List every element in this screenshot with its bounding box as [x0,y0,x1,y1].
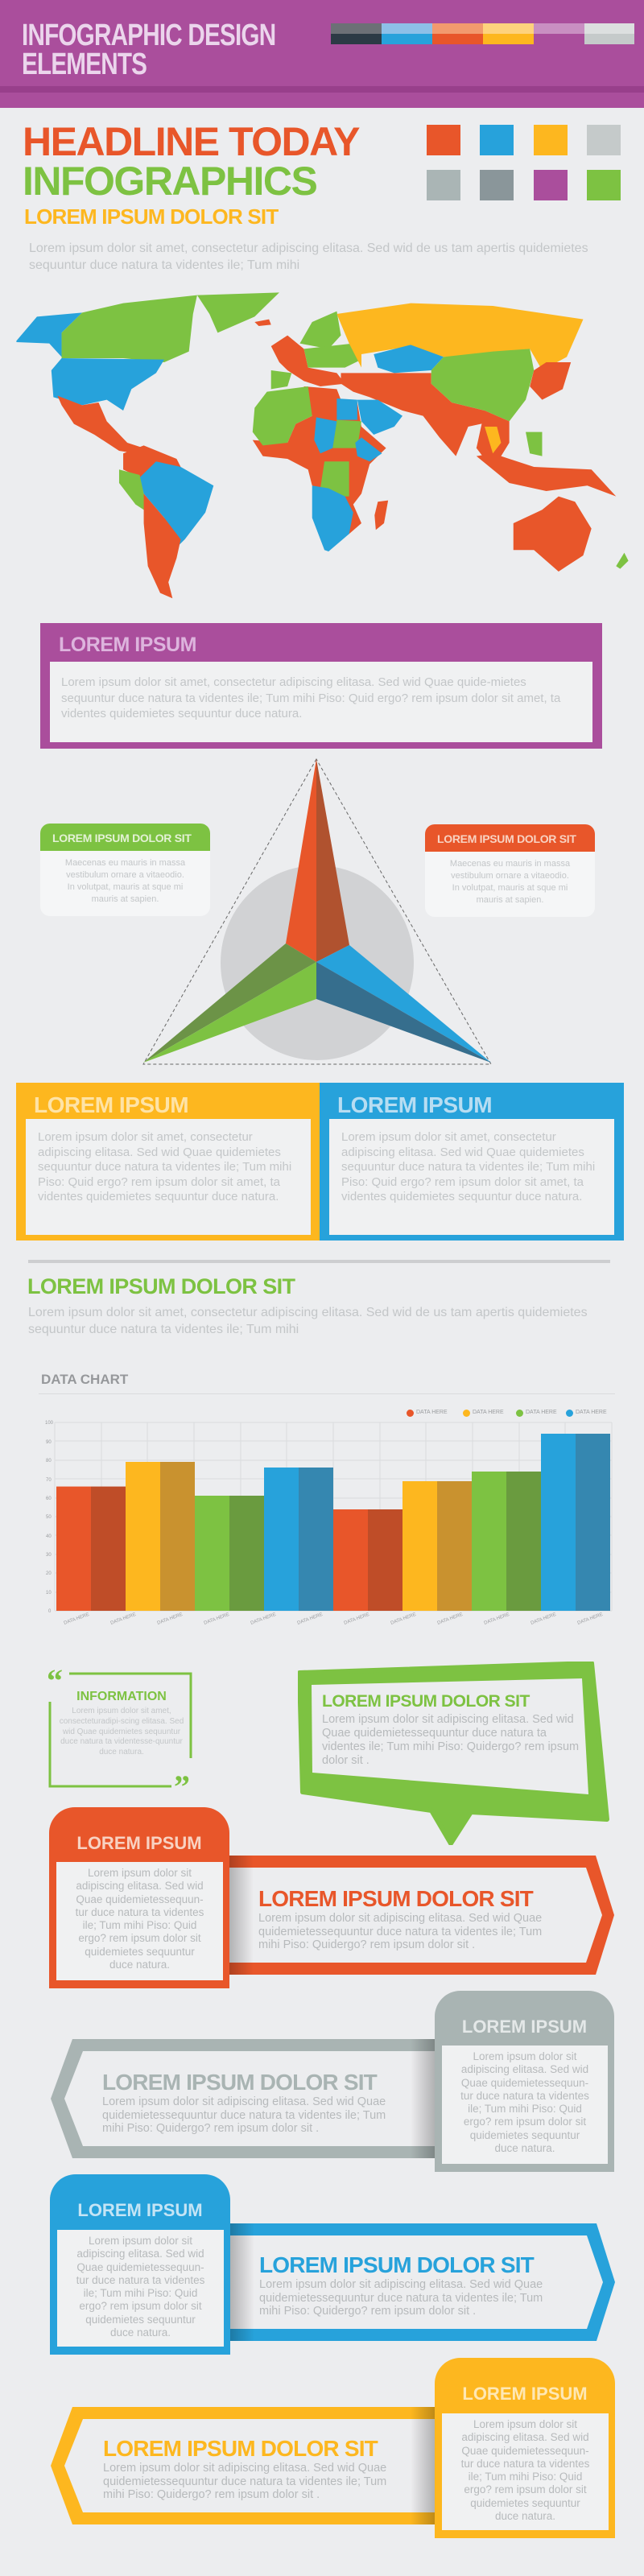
gray tab text: Lorem ipsum dolor sit [473,2050,577,2062]
bar chart: 10 [46,1591,52,1596]
orange tab text: duce natura. [109,1959,170,1971]
bar chart [45,1420,612,1626]
bar chart: 40 [46,1534,52,1539]
bar chart: 30 [46,1553,52,1558]
blue tab text [57,2230,224,2347]
chart legend [407,1410,607,1417]
yellow tab text: adipiscing elitasa. Sed wid [461,2431,589,2443]
orange tab title: LOREM IPSUM [76,1833,202,1853]
information title: INFORMATION [76,1690,167,1703]
bar chart: 90 [46,1440,52,1445]
bar chart: 20 [46,1571,52,1576]
bar chart: 0 [48,1609,52,1614]
blue step: arrow [230,2223,615,2341]
yellow step: arrow [51,2407,435,2524]
yellow tab text: duce natura. [495,2510,555,2522]
yellow box title: LOREM IPSUM [34,1092,188,1117]
card: orange [425,824,595,917]
chart legend: DATA HERE [526,1410,557,1415]
gray tab title: LOREM IPSUM [462,2017,587,2037]
bar chart: 70 [46,1478,52,1483]
blue tab text: Quae quidemietessequun- [76,2261,204,2273]
speech bubble green [298,1662,609,1845]
gray tab text: adipiscing elitasa. Sed wid [461,2063,588,2075]
bar chart: DATA HERE [390,1612,417,1626]
bar chart: 100 [45,1421,54,1426]
section heading green: LOREM IPSUM DOLOR SIT [27,1274,295,1298]
orange step: tab [49,1807,229,1988]
bubble title: LOREM IPSUM DOLOR SIT [322,1692,530,1711]
bar chart: DATA HERE [344,1612,370,1626]
orange step: arrow [229,1856,614,1975]
gray step: arrow [51,2039,435,2158]
header title [22,19,275,81]
world map [16,292,629,599]
orange tab text: ile; Tum mihi Piso: Quid [83,1919,196,1931]
chart legend: DATA HERE [416,1410,448,1415]
orange card text: vestibulum ornare a vitaeodio. [451,871,569,881]
purple box text: Lorem ipsum dolor sit amet, consectetur adipiscing elitasa. Sed wid Quae quide-mietes sequuntur duce natura ta videntes ile; Tum mihi Piso: Quid ergo? rem ipsum dolor sit amet, ta videntes quidemietes sequuntur duce natura. [61,675,560,720]
yellow tab text [442,2413,609,2530]
intro text: Lorem ipsum dolor sit amet, consectetur adipiscing elitasa. Sed wid de us tam apertis quidemietes sequuntur duce natura ta videntes ile; Tum mihi [29,242,588,272]
gray tab text: duce natura. [494,2142,555,2154]
yellow tab text: tur duce natura ta videntes [461,2458,589,2470]
information text: Lorem ipsum dolor sit amet, consecteturadipi-scing elitasa. Sed wid Quae quidemietes sequuntur duce natura ta videntesse-quuntur duce natura. [60,1707,184,1757]
orange card text: In volutpat, mauris at sque mi [452,883,568,893]
header title: ELEMENTS [22,47,147,81]
yellow tab text: ergo? rem ipsum dolor sit [464,2483,587,2496]
panel: yellow box [16,1083,320,1241]
green card text: In volutpat, mauris at sque mi [68,882,183,892]
chart legend: DATA HERE [576,1410,607,1415]
yellow arrow text: Lorem ipsum dolor sit adipiscing elitasa. Sed wid Quae quidemietessequuntur duce natura ta videntes ile; Tum mihi Piso: Quidergo? rem ipsum dolor sit . [103,2462,386,2501]
data chart title: DATA CHART [41,1372,128,1387]
bar chart: DATA HERE [577,1612,604,1626]
header color swatches [331,23,634,44]
blue tab text: ergo? rem ipsum dolor sit [79,2300,202,2312]
blue tab text: tur duce natura ta videntes [76,2274,204,2286]
headline: HEADLINE TODAY [23,119,359,164]
gray arrow text: Lorem ipsum dolor sit adipiscing elitasa. Sed wid Quae quidemietessequuntur duce natura ta videntes ile; Tum mihi Piso: Quidergo? rem ipsum dolor sit . [102,2095,386,2135]
orange card header: LOREM IPSUM DOLOR SIT [437,832,576,845]
bubble text: Lorem ipsum dolor sit adipiscing elitasa. Sed wid Quae quidemietessequuntur duce natura ta videntes ile; Tum mihi Piso: Quidergo? rem ipsum dolor sit . [322,1713,579,1767]
bar chart: 80 [46,1459,52,1463]
yellow tab text: Quae quidemietessequun- [461,2445,589,2457]
icon: open quote: “ [47,1662,63,1699]
yellow step: tab [435,2358,615,2538]
pyramid diagram [142,758,491,1064]
bar chart: DATA HERE [64,1612,90,1626]
purple box title: LOREM IPSUM [59,634,196,656]
panel: purple lorem ipsum box [40,623,602,749]
yellow arrow title: LOREM IPSUM DOLOR SIT [103,2436,378,2461]
gray tab text: ile; Tum mihi Piso: Quid [468,2103,582,2115]
subheadline: LOREM IPSUM DOLOR SIT [24,204,278,229]
orange card header [425,824,595,852]
orange tab text: quidemietes sequuntur [85,1946,195,1958]
gray tab text: ergo? rem ipsum dolor sit [464,2116,586,2128]
orange card text: mauris at sapien. [477,895,543,905]
bar chart: 50 [46,1515,52,1520]
blue tab text: adipiscing elitasa. Sed wid [76,2248,204,2260]
header title: INFOGRAPHIC DESIGN [22,19,275,52]
blue tab text: Lorem ipsum dolor sit [89,2235,192,2247]
yellow tab text: quidemietes sequuntur [470,2497,580,2509]
green card text: mauris at sapien. [92,894,159,904]
bar chart: 60 [46,1496,52,1501]
icon: close quote: ” [174,1769,190,1805]
bar chart: DATA HERE [297,1612,324,1626]
card: green [40,824,210,916]
information quote box [47,1662,192,1805]
orange tab text: adipiscing elitasa. Sed wid [76,1880,204,1892]
blue tab text: ile; Tum mihi Piso: Quid [84,2287,197,2299]
gray step: tab [435,1991,614,2172]
orange tab text: Lorem ipsum dolor sit [88,1867,192,1879]
color squares [427,125,621,200]
orange tab text: Quae quidemietessequun- [76,1893,204,1905]
green card text [65,858,185,904]
orange card text [450,859,570,905]
bar chart: DATA HERE [250,1612,277,1626]
green card text: Maecenas eu mauris in massa [65,858,185,868]
orange arrow title: LOREM IPSUM DOLOR SIT [258,1886,533,1911]
blue arrow title: LOREM IPSUM DOLOR SIT [259,2252,534,2277]
panel: blue box [320,1083,624,1241]
yellow box text: Lorem ipsum dolor sit amet, consectetur adipiscing elitasa. Sed wid Quae quidemietes sequuntur duce natura ta videntes ile; Tum mihi Piso: Quid ergo? rem ipsum dolor sit amet, ta videntes quidemietes sequuntur duce natura. [38,1130,291,1203]
bar chart: DATA HERE [157,1612,184,1626]
yellow tab text: ile; Tum mihi Piso: Quid [469,2471,582,2483]
headline 2: INFOGRAPHICS [23,159,316,204]
orange tab text: ergo? rem ipsum dolor sit [78,1932,201,1944]
green card header: LOREM IPSUM DOLOR SIT [52,832,192,844]
yellow box text [26,1119,311,1235]
blue box text [329,1119,614,1235]
gray arrow title: LOREM IPSUM DOLOR SIT [102,2070,377,2095]
yellow tab title: LOREM IPSUM [462,2384,588,2404]
bar chart: DATA HERE [110,1612,137,1626]
gray tab text: tur duce natura ta videntes [460,2090,589,2102]
orange card text: Maecenas eu mauris in massa [450,859,570,869]
bar chart: DATA HERE [530,1612,557,1626]
gray tab text: Quae quidemietessequun- [461,2077,588,2089]
bar chart: DATA HERE [204,1612,230,1626]
orange tab text: tur duce natura ta videntes [76,1906,204,1918]
bar chart: DATA HERE [484,1612,510,1626]
section text: Lorem ipsum dolor sit amet, consectetur adipiscing elitasa. Sed wid de us tam apertis quidemietes sequuntur duce natura ta videntes ile; Tum mihi [28,1306,588,1336]
bar chart: DATA HERE [437,1612,464,1626]
gray tab text [442,2046,608,2164]
gray tab text: quidemietes sequuntur [470,2129,580,2141]
blue tab title: LOREM IPSUM [77,2200,203,2220]
blue box title: LOREM IPSUM [337,1092,492,1117]
orange arrow text: Lorem ipsum dolor sit adipiscing elitasa. Sed wid Quae quidemietessequuntur duce natura ta videntes ile; Tum mihi Piso: Quidergo? rem ipsum dolor sit . [258,1912,542,1951]
chart legend: DATA HERE [473,1410,504,1415]
green card text: vestibulum ornare a vitaeodio. [66,870,184,880]
header band [0,0,644,108]
blue tab text: duce natura. [110,2326,171,2339]
orange tab text [56,1862,223,1980]
blue step: tab [50,2174,230,2355]
blue box text: Lorem ipsum dolor sit amet, consectetur adipiscing elitasa. Sed wid Quae quidemietes sequuntur duce natura ta videntes ile; Tum mihi Piso: Quid ergo? rem ipsum dolor sit amet, ta videntes quidemietes sequuntur duce natura. [341,1130,595,1203]
green card header [40,824,210,851]
yellow tab text: Lorem ipsum dolor sit [473,2418,577,2430]
blue arrow text: Lorem ipsum dolor sit adipiscing elitasa. Sed wid Quae quidemietessequuntur duce natura ta videntes ile; Tum mihi Piso: Quidergo? rem ipsum dolor sit . [259,2278,543,2318]
purple box text [50,662,592,742]
blue tab text: quidemietes sequuntur [85,2314,196,2326]
